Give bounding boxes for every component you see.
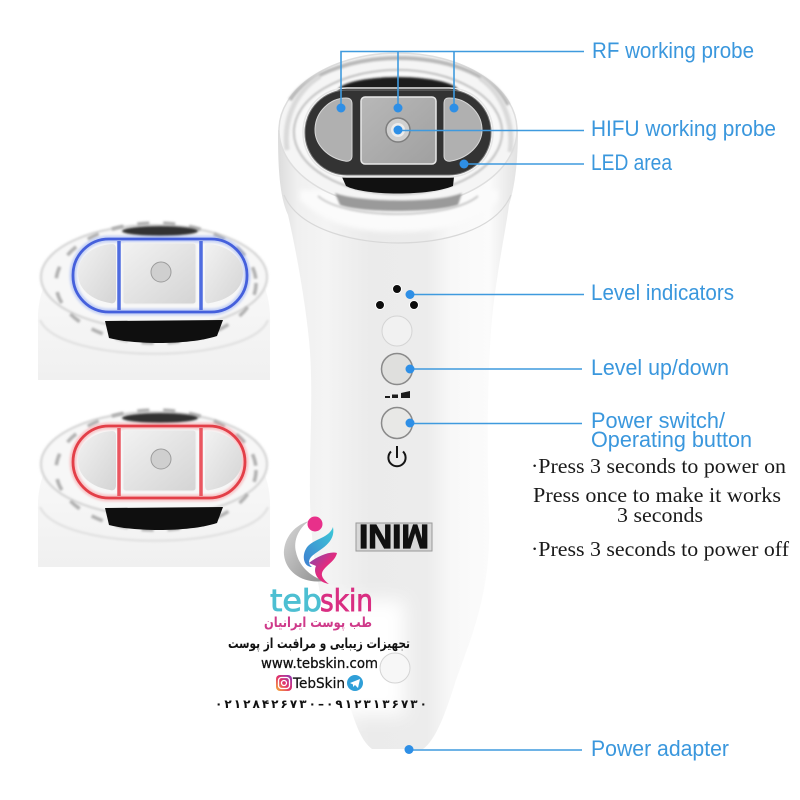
callout: Power switch: Power switch/ xyxy=(591,408,726,433)
shoulder arc xyxy=(284,195,511,243)
callout: Power adapter xyxy=(404,736,729,761)
blue LED loop xyxy=(73,239,247,312)
dark crescent xyxy=(122,413,198,423)
power button xyxy=(382,408,412,438)
callout: LED area xyxy=(460,150,673,175)
icon: telegram xyxy=(347,675,363,691)
text block: social handle: TebSkin xyxy=(292,676,345,692)
logo: teb skin wordmark: teb xyxy=(270,584,322,619)
text block: website: www.tebskin.com xyxy=(261,656,378,672)
panel: red LED head xyxy=(38,410,270,567)
callout: LED area: LED area xyxy=(591,150,673,175)
text block: power instructions xyxy=(531,454,789,561)
text block: Persian description: تجهیزات زیبایی و مراقبت از پوست xyxy=(228,636,410,652)
indicator dots xyxy=(376,284,418,310)
text block: power instructions: Press once to make it works xyxy=(533,483,781,507)
lens xyxy=(151,262,171,282)
blank button xyxy=(382,316,412,346)
lens xyxy=(151,449,171,469)
callout: HIFU working probe xyxy=(394,116,776,141)
right pad xyxy=(205,244,243,303)
right pad xyxy=(205,431,242,490)
lower blank button xyxy=(380,653,410,683)
logo: Persian tagline: طب پوست ایرانیان xyxy=(264,615,372,631)
callout: HIFU working probe: HIFU working probe xyxy=(591,116,776,141)
red LED loop xyxy=(73,426,245,498)
band under probe xyxy=(335,193,462,211)
logo: tebskin emblem xyxy=(284,516,337,584)
dark crescent xyxy=(122,226,198,236)
left pad xyxy=(78,244,116,303)
callout: Level indicators xyxy=(406,280,734,305)
text block: power instructions: 3 seconds xyxy=(617,503,703,527)
icon: instagram xyxy=(276,675,292,691)
dark bar bottom xyxy=(342,177,454,194)
MINI brand mark: MINI xyxy=(359,518,429,555)
HIFU plate xyxy=(361,97,436,164)
device handle xyxy=(278,130,518,749)
callout: Power switch: Operating button xyxy=(591,427,752,452)
signal bars icon xyxy=(385,391,410,398)
panel: device body xyxy=(225,53,518,749)
callout: Level up/down xyxy=(406,355,729,380)
left RF probe xyxy=(315,98,352,161)
callout: Level indicators: Level indicators xyxy=(591,280,734,305)
white glow behind logo xyxy=(225,600,405,715)
callout: Level up/down: Level up/down xyxy=(591,355,729,380)
panel: blue LED head xyxy=(38,223,270,380)
dark crescent top xyxy=(338,77,458,105)
callout: RF working probe: RF working probe xyxy=(592,38,754,63)
glass rim xyxy=(279,53,517,207)
text block: power instructions: ·Press 3 seconds to power off xyxy=(531,537,789,561)
centre pad xyxy=(123,430,196,491)
left pad xyxy=(78,431,116,490)
power icon xyxy=(388,446,406,466)
text block: phone numbers: ۰۲۱۲۸۴۲۶۷۳۰–۰۹۱۲۳۱۳۶۷۳۰ xyxy=(215,697,427,711)
centre pad xyxy=(123,243,196,304)
logo: teb skin wordmark: skin xyxy=(320,584,373,619)
callout: RF working probe xyxy=(336,38,754,112)
callout: Power adapter: Power adapter xyxy=(591,736,729,761)
HIFU lens xyxy=(386,118,410,142)
level button xyxy=(382,354,412,384)
text block: power instructions: ·Press 3 seconds to power on xyxy=(531,454,787,478)
dark bar xyxy=(105,507,223,530)
probe plate xyxy=(305,90,491,175)
right RF probe xyxy=(444,98,482,161)
dark bar xyxy=(105,320,223,343)
callout: Power switch xyxy=(406,408,752,452)
logo: teb skin wordmark xyxy=(270,584,373,619)
